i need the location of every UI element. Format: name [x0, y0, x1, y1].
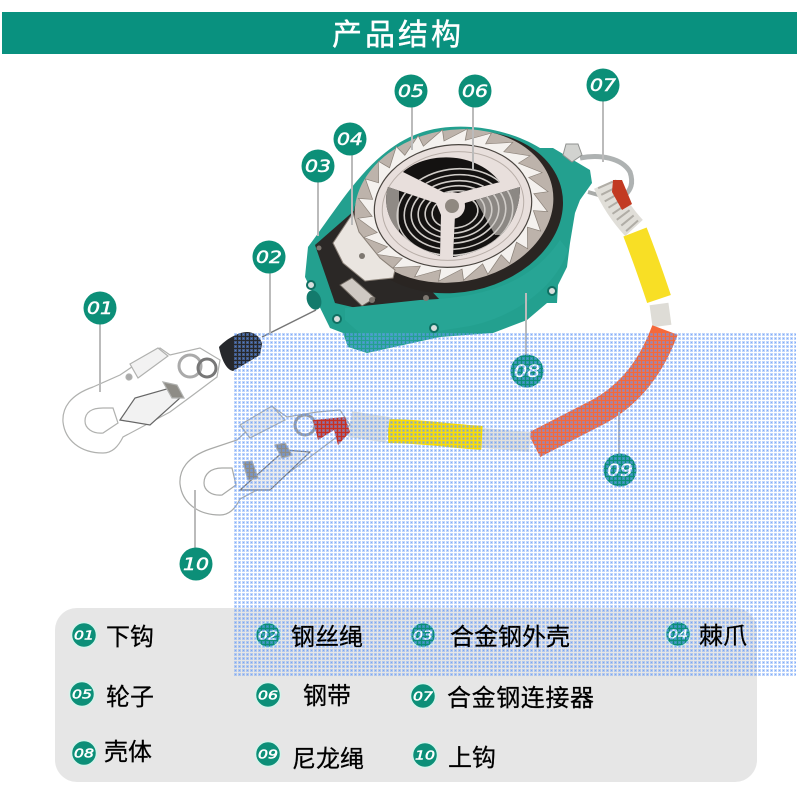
- legend item 10: [412, 742, 496, 772]
- legend label 04: 棘爪: [699, 623, 747, 650]
- callout 08: 08: [514, 362, 540, 382]
- legend badge 02: 02: [258, 628, 278, 642]
- leader lines: [100, 100, 619, 549]
- legend item 08: 壳体: [104, 739, 152, 766]
- plate hub: [439, 193, 465, 219]
- upper hook: [180, 406, 350, 515]
- legend item 07: 07: [413, 690, 433, 704]
- callout 01: [84, 292, 116, 324]
- rubber stopper: [219, 332, 262, 371]
- spiral spring windows: [386, 157, 520, 257]
- rope assembly: [350, 180, 665, 445]
- callout 02: 02: [256, 248, 282, 268]
- legend label 03: 合金钢外壳: [450, 624, 570, 651]
- steel plate: [366, 135, 540, 277]
- callout 10: [180, 548, 212, 580]
- callout 05: [394, 74, 428, 108]
- legend item 05: [70, 682, 154, 711]
- housing screws: [307, 281, 556, 332]
- legend item 10: 上钩: [448, 745, 496, 772]
- callout 05: 05: [398, 82, 424, 102]
- callout 09: 09: [607, 461, 633, 481]
- body shell: [305, 127, 592, 353]
- cavity: [315, 210, 440, 310]
- callout 03: [302, 150, 334, 182]
- legend item 09: [256, 742, 364, 773]
- middle braid: [659, 304, 662, 326]
- red knot: [612, 180, 632, 210]
- callout 04: 04: [337, 130, 363, 150]
- retractor device: [219, 112, 592, 371]
- lower latch: [340, 278, 375, 306]
- legend item 07: 合金钢连接器: [447, 685, 595, 712]
- legend badge 04: [666, 622, 690, 646]
- legend badge 02: [256, 622, 280, 648]
- legend item 05: 轮子: [106, 684, 154, 711]
- plate inner ring line: [375, 143, 531, 269]
- shackle: [563, 144, 632, 196]
- callout 06: [458, 74, 492, 108]
- callout 09: [604, 454, 636, 486]
- legend badge 03: 03: [413, 628, 433, 642]
- lower yellow sleeve: [388, 431, 482, 438]
- lower hook: [63, 348, 220, 453]
- wire port: [304, 288, 324, 312]
- upper braid: [605, 184, 634, 228]
- legend item 09: 09: [258, 748, 278, 762]
- callout 03: 03: [305, 157, 331, 177]
- callout 07: [586, 68, 620, 102]
- cavity screws: [316, 246, 429, 303]
- legend label 02: 钢丝绳: [291, 624, 363, 651]
- front wall highlight: [345, 240, 568, 342]
- upper yellow sleeve: [635, 232, 659, 299]
- title banner: 产品结构: [332, 19, 464, 52]
- callout 04: [334, 122, 366, 156]
- drum ring: [338, 112, 578, 312]
- red end knot: [313, 417, 350, 445]
- callout 08: [510, 354, 544, 388]
- ratchet wheel: [347, 116, 559, 294]
- legend item 10: 10: [415, 748, 435, 762]
- legend item 01: 下钩: [106, 624, 154, 651]
- legend item 01: 01: [74, 628, 94, 642]
- wire rope: [262, 310, 316, 337]
- upper braid texture: [605, 184, 634, 228]
- legend panel: [55, 608, 757, 782]
- pawl: [333, 213, 395, 281]
- callout 01: 01: [87, 299, 113, 319]
- legend badge 03: [410, 622, 436, 648]
- legend item 08: 08: [74, 746, 94, 760]
- legend item 05: 05: [72, 688, 92, 702]
- legend item 06: [256, 682, 351, 710]
- legend item 08: [72, 739, 152, 766]
- callout 07: 07: [590, 76, 616, 96]
- legend item 06: 06: [258, 688, 278, 702]
- callout 10: 10: [183, 555, 209, 575]
- title banner: [2, 12, 797, 54]
- legend item 06: 钢带: [303, 683, 351, 710]
- callout 02: [252, 240, 286, 274]
- dotted blue overlay: [234, 333, 796, 677]
- legend item 01: [72, 622, 154, 651]
- lower braid: [482, 438, 530, 442]
- orange sleeve: [534, 330, 665, 445]
- end braid: [350, 424, 388, 430]
- legend badge 04: 04: [668, 628, 688, 642]
- legend item 09: 尼龙绳: [292, 746, 364, 773]
- callout 06: 06: [462, 82, 488, 102]
